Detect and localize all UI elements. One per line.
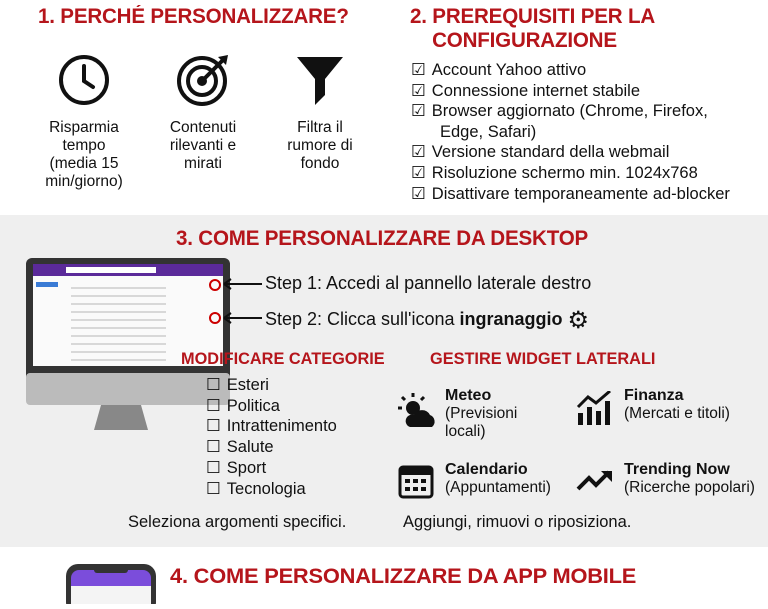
checklist: Connessione internet stabile: [432, 82, 640, 100]
caption: filtra: Filtra il rumore di fondo: [287, 119, 353, 172]
text: step 2: Step 2: Clicca sull'icona ingranaggio ⚙: [265, 307, 589, 334]
text: seleziona: Seleziona argomenti specifici.: [128, 513, 346, 531]
checklist: Account Yahoo attivo: [432, 61, 586, 79]
title: section 3: 3. COME PERSONALIZZARE DA DESKTOP: [176, 227, 588, 250]
checklist: [412, 61, 730, 203]
widget: meteo: [398, 387, 517, 440]
list: categorie: Sport: [227, 459, 266, 477]
widget: meteo: (Previsioni: [445, 405, 517, 422]
list: categorie: Tecnologia: [227, 480, 306, 498]
widget: calendario: (Appuntamenti): [445, 479, 551, 496]
widget: trending: Trending Now: [624, 461, 730, 478]
title: section 2: 2. PREREQUISITI PER LA: [410, 5, 655, 28]
text: step 1: Step 1: Accedi al pannello laterale destro: [265, 273, 591, 293]
checklist: Edge, Safari): [440, 123, 536, 141]
icon: clock: [59, 55, 109, 105]
widget: trending: (Ricerche popolari): [624, 479, 755, 496]
arrow: step 2: [224, 312, 262, 324]
widget: finanza: (Mercati e titoli): [624, 405, 730, 422]
checklist: Risoluzione schermo min. 1024x768: [432, 164, 698, 182]
title: section 2: CONFIGURAZIONE: [432, 29, 617, 52]
widget: finanza: Finanza: [624, 387, 684, 404]
widget: finanza: [577, 387, 730, 425]
caption: risparmia: Risparmia tempo (media 15 min/giorno): [45, 119, 123, 190]
icon: phone: [66, 564, 156, 604]
text: aggiungi: Aggiungi, rimuovi o riposiziona.: [403, 513, 631, 531]
widget: meteo: locali): [445, 423, 485, 440]
list: categorie: Salute: [227, 438, 274, 456]
title: section 1: 1. PERCHÉ PERSONALIZZARE?: [38, 5, 349, 28]
list: categorie: Intrattenimento: [227, 417, 337, 435]
widget: calendario: Calendario: [445, 461, 528, 478]
caption: contenuti: Contenuti rilevanti e mirati: [170, 119, 236, 172]
title: section 4: 4. COME PERSONALIZZARE DA APP MOBILE: [170, 565, 636, 588]
title: section 2: [410, 5, 655, 52]
panel: desktop: [0, 215, 768, 547]
checklist: Disattivare temporaneamente ad-blocker: [432, 185, 730, 203]
subtitle: widget: GESTIRE WIDGET LATERALI: [430, 349, 655, 368]
list: categorie: Esteri: [227, 376, 269, 394]
list: categorie: Politica: [227, 397, 280, 415]
icon: monitor: [26, 258, 230, 430]
arrow: step 1: [224, 278, 262, 290]
widget: meteo: Meteo: [445, 387, 491, 404]
subtitle: categorie: MODIFICARE CATEGORIE: [181, 349, 385, 368]
list: categorie: [208, 376, 337, 498]
checklist: Versione standard della webmail: [432, 143, 669, 161]
checklist: Browser aggiornato (Chrome, Firefox,: [432, 102, 708, 120]
widget: calendario: [398, 461, 551, 498]
icon: funnel: [297, 57, 343, 105]
widget: trending: [576, 461, 755, 496]
icon: target: [177, 55, 228, 106]
